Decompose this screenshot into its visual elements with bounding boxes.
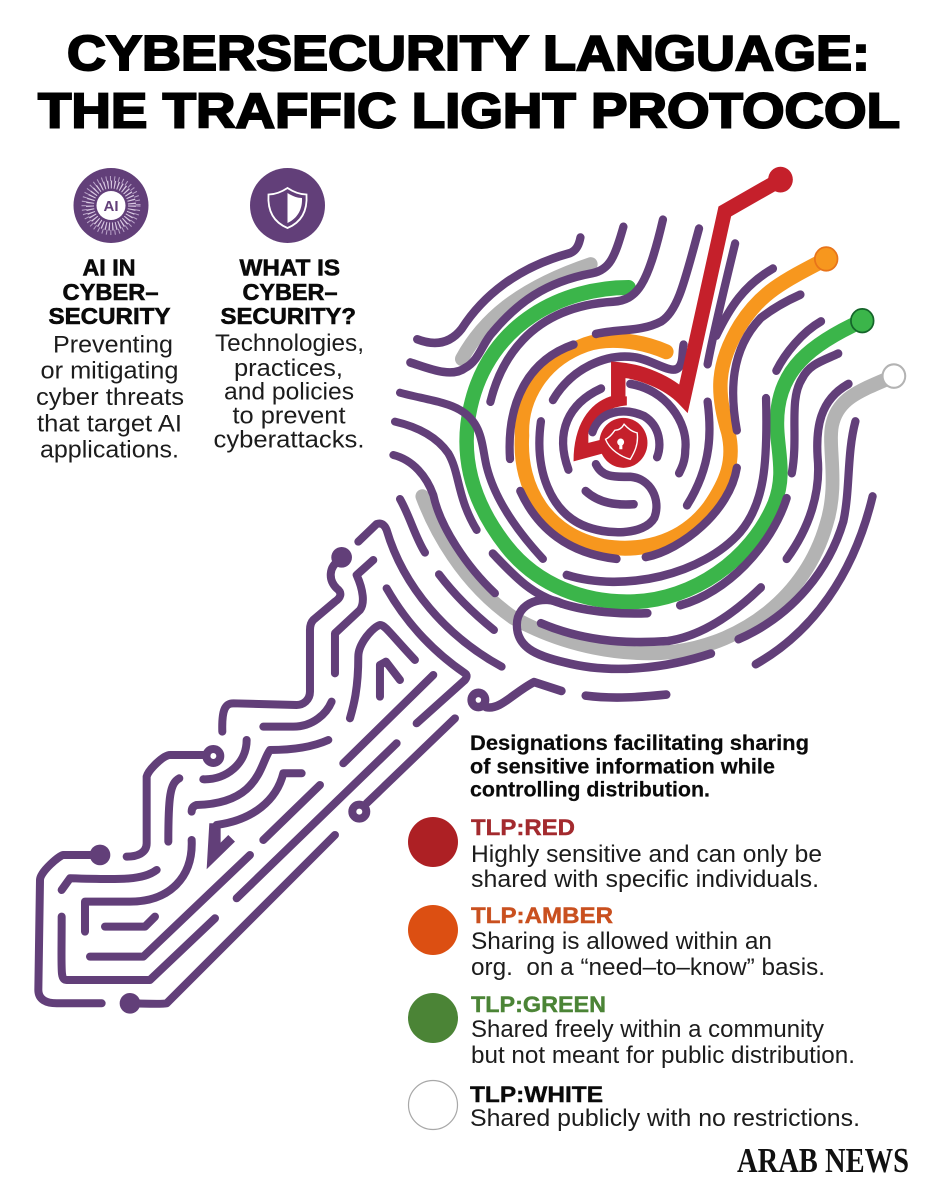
heading: what is cybersecurity: CYBER– [242,279,338,305]
legend: TLP red: Highly sensitive and can only be [471,841,822,868]
text: legend intro: of sensitive information while [470,756,775,778]
legend: TLP amber: TLP:AMBER [471,903,613,928]
text: what is cybersecurity description: Technologies, [215,330,364,357]
text: AI in cybersecurity description: or mitigating [40,358,178,384]
legend: TLP green: but not meant for public distribution. [471,1042,855,1069]
title: CYBERSECURITY LANGUAGE: [67,27,870,81]
legend: TLP white [408,1080,860,1132]
legend: TLP red [408,815,822,893]
legend: TLP white: TLP:WHITE [470,1082,603,1107]
illustration: fingerprint key [38,167,905,1014]
icon: AI badge: AI [104,198,118,215]
path: TLP green ridge [467,287,874,602]
heading: what is cybersecurity: SECURITY? [220,303,356,329]
text: legend intro: Designations facilitating sharing [470,732,809,755]
panel: what is cybersecurity [214,168,364,454]
fingerprint: coloured TLP paths under the ridges [422,247,905,653]
text: legend intro [470,732,809,802]
heading: what is cybersecurity: WHAT IS [240,254,340,280]
heading: AI in cybersecurity: AI IN [82,254,136,280]
text: legend intro: controlling distribution. [470,778,710,802]
text: what is cybersecurity description: practices, [234,355,343,382]
path: TLP red line with centre lock [574,167,793,468]
panel: AI in cybersecurity [36,168,184,464]
legend: TLP amber [408,903,825,981]
title [38,27,900,138]
title: THE TRAFFIC LIGHT PROTOCOL [38,84,900,138]
text: AI in cybersecurity description: Preventing [53,332,173,358]
path: TLP amber ridge [522,247,838,548]
icon: AI badge [74,168,148,243]
key blade: circuit traces [38,523,502,1014]
legend: TLP green: TLP:GREEN [471,992,606,1017]
text: what is cybersecurity description: to prevent [232,402,346,430]
text: AI in cybersecurity description: cyber threats [36,384,184,411]
legend: TLP green [408,992,855,1069]
text: AI in cybersecurity description: that target AI [37,410,182,438]
heading: AI in cybersecurity: CYBER– [62,279,158,305]
legend: TLP amber: Sharing is allowed within an [471,928,772,955]
legend: TLP red: shared with specific individuals. [471,866,819,893]
text: AI in cybersecurity description: applications. [40,436,179,464]
heading: what is cybersecurity [220,254,356,329]
path: TLP white grey ridge [422,264,905,653]
text: AI in cybersecurity description [36,332,184,464]
heading: AI in cybersecurity [48,254,171,329]
text: what is cybersecurity description [214,330,364,454]
text: what is cybersecurity description: cyberattacks. [214,426,364,454]
text: what is cybersecurity description: and policies [224,378,354,406]
heading: AI in cybersecurity: SECURITY [48,303,171,329]
legend: TLP green: Shared freely within a community [471,1016,824,1043]
legend: TLP amber: org. on a “need–to–know” basis. [471,954,825,981]
icon: shield [250,168,325,243]
legend: TLP white: Shared publicly with no restrictions. [470,1105,860,1132]
icon: shield lock [606,424,637,459]
legend: TLP red: TLP:RED [471,815,575,840]
fingerprint: purple ridges, left flank [393,393,543,630]
fingerprint: purple ridges, upper area [410,220,873,708]
